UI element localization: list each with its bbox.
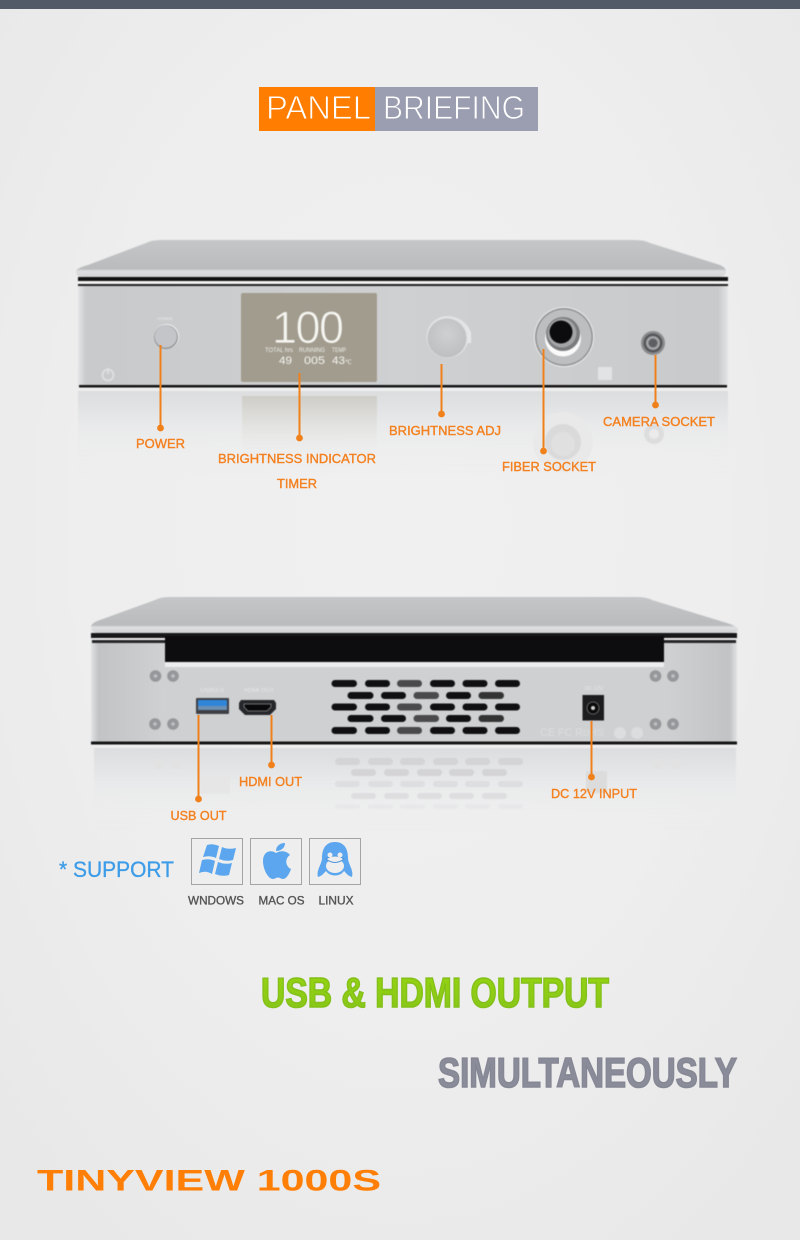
callout: brightness indicator timer: BRIGHTNESS INDICATOR [218, 451, 376, 466]
icon: linux penguin [310, 838, 360, 884]
callout: brightness adj [389, 364, 501, 438]
callout: hdmi out [239, 715, 302, 789]
callout: camera socket [603, 355, 715, 429]
support label: * SUPPORT [59, 857, 174, 882]
certification marks [540, 727, 643, 739]
callout: hdmi out: HDMI OUT [239, 774, 302, 789]
LCD display: 49 [279, 355, 292, 367]
callout: fiber socket [502, 349, 596, 474]
heading: panel briefing: PANEL [266, 90, 371, 127]
rear body [91, 636, 165, 743]
os labels: LINUX [318, 896, 354, 908]
brand: tinyview 1000s: TINYVIEW 1000S [37, 1164, 381, 1198]
LCD display: 100 [272, 302, 344, 353]
front lid [76, 240, 726, 277]
callout: power: POWER [136, 436, 185, 451]
USB port [196, 688, 229, 714]
heading: panel briefing [259, 87, 538, 131]
rear panel device [91, 597, 738, 830]
heading: panel briefing: BRIEFING [383, 90, 525, 127]
icon: windows [192, 838, 242, 884]
rear black slot [165, 636, 664, 662]
front reflection [78, 391, 728, 473]
callout: brightness adj: BRIGHTNESS ADJ [389, 423, 501, 438]
rear reflection [94, 748, 736, 830]
icon: power mark [102, 368, 114, 380]
icon: apple [250, 838, 302, 884]
LCD display: TOTAL hrs [265, 348, 293, 354]
callout: power [136, 345, 185, 451]
power button: POWER [157, 316, 173, 321]
USB port: USB3.0 [200, 688, 224, 694]
LCD display: ℃ [345, 360, 352, 366]
camera socket [641, 331, 665, 355]
top bar [0, 0, 800, 9]
screws [149, 670, 679, 730]
callout: dc 12v input [551, 721, 637, 801]
ventilation slots [332, 680, 520, 734]
callout: brightness indicator timer [218, 373, 376, 491]
LCD display: TEMP [332, 348, 346, 354]
front body [78, 286, 728, 385]
rear lid [91, 597, 738, 633]
callout: dc 12v input: DC 12V INPUT [551, 786, 637, 801]
callout: fiber socket: FIBER SOCKET [502, 459, 596, 474]
os labels: WNDOWS [188, 896, 244, 908]
LCD display: RUNNING [299, 348, 325, 354]
callout: camera socket: CAMERA SOCKET [603, 414, 715, 429]
certification marks: CE FC RoHS [540, 727, 604, 739]
callout: usb out: USB OUT [170, 808, 227, 823]
LCD display: 43 [332, 355, 345, 367]
headline: usb & hdmi output: USB & HDMI OUTPUT [261, 969, 609, 1016]
HDMI port [239, 688, 276, 715]
HDMI port: HDMI OUT [244, 688, 274, 694]
DC power jack: DC 12V [585, 686, 604, 692]
front panel device [76, 240, 728, 473]
LCD display [241, 293, 377, 382]
status mark [598, 367, 612, 380]
LCD display: 005 [304, 355, 325, 367]
fiber socket [534, 307, 594, 367]
os labels [188, 896, 354, 908]
power button [154, 316, 179, 349]
os labels: MAC OS [258, 896, 305, 908]
callout: usb out [170, 715, 227, 823]
brightness knob [426, 316, 471, 358]
DC power jack [582, 686, 604, 720]
callout: brightness indicator timer: TIMER [277, 476, 317, 491]
